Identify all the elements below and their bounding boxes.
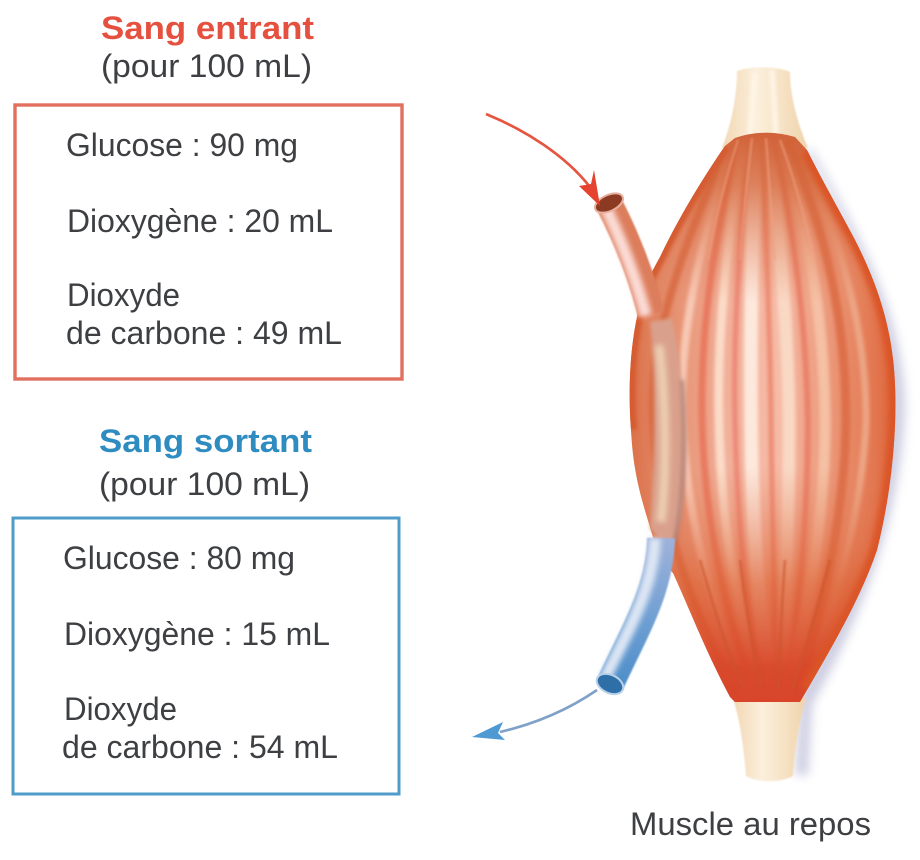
heading: sang sortant: (pour 100 mL)	[99, 466, 310, 502]
caption: Muscle au repos	[630, 806, 871, 842]
text: dioxyde de carbone sortant	[62, 691, 338, 765]
text: dioxyde de carbone entrant	[66, 277, 342, 351]
icon: lower tendon	[733, 698, 806, 781]
text: dioxyde de carbone sortant: Dioxyde	[64, 691, 177, 727]
text: dioxyde de carbone entrant: Dioxyde	[67, 277, 180, 313]
arrow: blood out	[472, 690, 597, 740]
text: dioxyde de carbone entrant: de carbone : 49 mL	[66, 315, 342, 351]
text: glucose sortant: Glucose : 80 mg	[63, 540, 295, 576]
soft shadow	[795, 150, 905, 775]
text: dioxyde de carbone sortant: de carbone : 54 mL	[62, 729, 338, 765]
text: dioxygene sortant: Dioxygène : 15 mL	[64, 616, 330, 652]
heading: sang sortant	[99, 423, 312, 502]
icon: red artery	[592, 189, 651, 316]
arrow: blood in	[486, 114, 600, 206]
heading: sang entrant	[101, 10, 314, 84]
edge darkening	[630, 146, 725, 430]
text: dioxygene entrant: Dioxygène : 20 mL	[67, 203, 333, 239]
heading: sang entrant: Sang entrant	[101, 10, 314, 46]
icon: blue vein	[594, 538, 661, 698]
fibres at both ends	[700, 138, 830, 690]
heading: sang sortant: Sang sortant	[99, 423, 312, 459]
icon: upper tendon	[722, 67, 808, 148]
icon: muscle belly	[620, 125, 905, 715]
muscle illustration	[592, 67, 905, 781]
panel: sang entrant	[15, 105, 402, 379]
icon: vessel on muscle surface	[650, 318, 685, 548]
panel: sang sortant	[13, 518, 399, 794]
text: glucose entrant: Glucose : 90 mg	[66, 127, 298, 163]
heading: sang entrant: (pour 100 mL)	[101, 48, 312, 84]
